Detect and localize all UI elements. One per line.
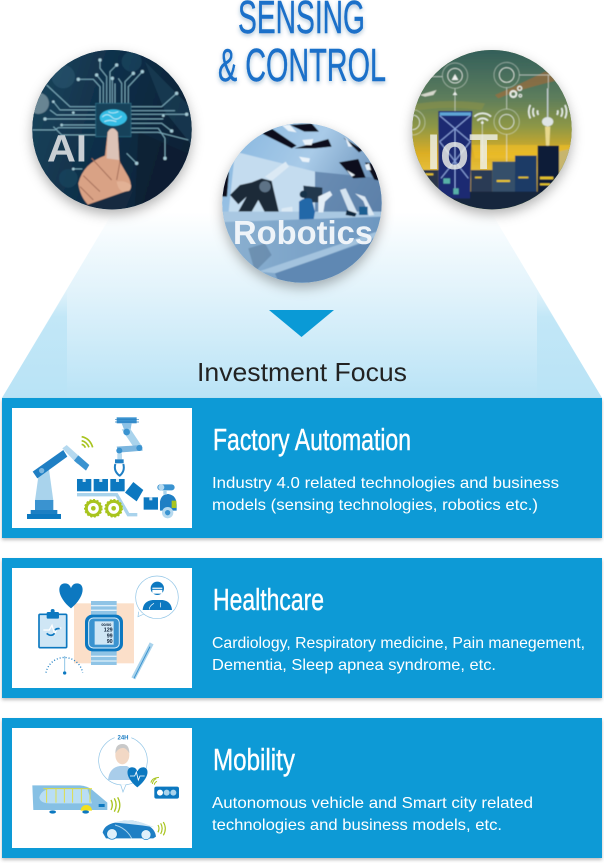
photo circle: Robotics: Robotics xyxy=(233,214,373,251)
description xyxy=(212,475,559,514)
buildings xyxy=(423,170,440,189)
description: Dementia, Sleep apnea syndrome, etc. xyxy=(212,657,496,674)
heading: Factory Automation xyxy=(213,422,411,457)
icon: health monitoring: 129 xyxy=(104,628,113,634)
floor xyxy=(225,216,380,278)
light blue funnel background xyxy=(2,212,602,398)
arrow pointing down xyxy=(269,310,334,337)
icon: health monitoring: 00/00 xyxy=(101,622,112,627)
icon: health monitoring: 90 xyxy=(107,639,113,645)
robot arms xyxy=(303,186,322,202)
panel: Healthcare xyxy=(2,558,602,698)
heading: Healthcare xyxy=(213,582,324,617)
hand xyxy=(78,128,131,205)
icon: connected vehicles: 24H xyxy=(117,736,128,742)
title xyxy=(218,0,386,91)
description: Industry 4.0 related technologies and business xyxy=(212,475,559,492)
description: models (sensing technologies, robotics etc.) xyxy=(212,497,538,514)
icon: health monitoring: 99 xyxy=(107,633,113,639)
photo circle: AI: AI xyxy=(47,128,87,170)
description: Autonomous vehicle and Smart city related xyxy=(212,795,533,812)
ceiling panels xyxy=(221,123,381,197)
panel: Mobility xyxy=(2,718,602,858)
photo circle: Robotics xyxy=(215,115,390,290)
IoT wifi and ring icons xyxy=(400,62,572,162)
description xyxy=(212,795,533,834)
description xyxy=(212,635,585,674)
description: Cardiology, Respiratory medicine, Pain manegement, xyxy=(212,635,585,652)
icon: factory robots xyxy=(27,417,177,519)
heading: Mobility xyxy=(213,742,295,777)
icon: health monitoring xyxy=(39,576,178,678)
photo circle: IoT: IoT xyxy=(427,124,498,180)
panel: Factory Automation xyxy=(2,398,602,538)
chip with brain xyxy=(96,103,131,137)
photo circle: IoT xyxy=(400,45,580,220)
heading: Investment Focus: Investment Focus xyxy=(197,357,407,387)
circuit traces xyxy=(32,60,188,169)
description: technologies and business models, etc. xyxy=(212,817,502,834)
icon: connected vehicles xyxy=(32,733,179,840)
photo circle: AI xyxy=(25,45,200,220)
title: & CONTROL xyxy=(218,39,386,91)
tower xyxy=(546,88,550,146)
